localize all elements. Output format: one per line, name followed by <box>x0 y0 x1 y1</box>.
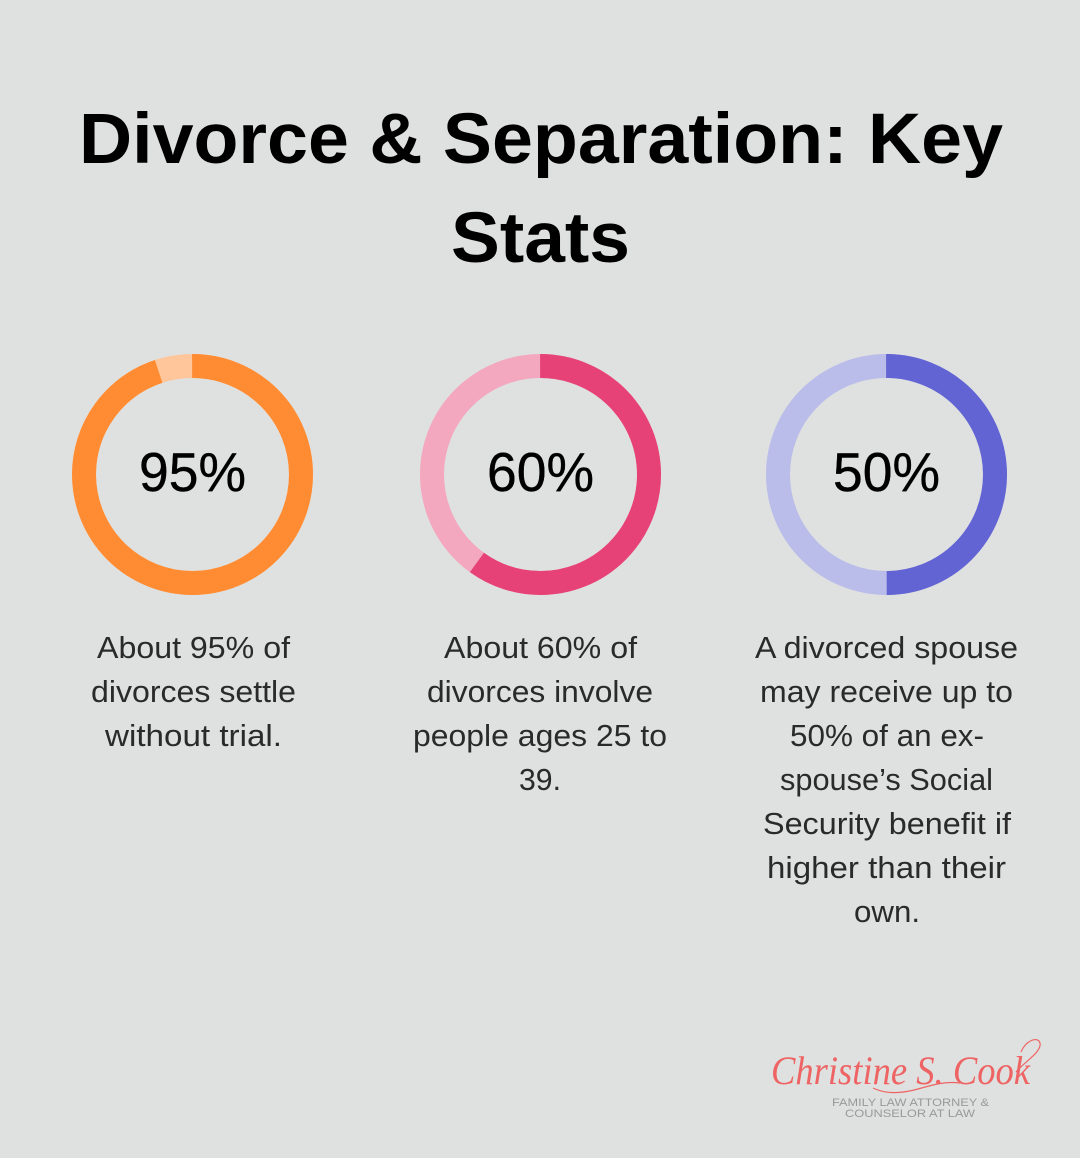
text block: 60% description <box>413 630 667 797</box>
title: Divorce & Separation: Key <box>79 100 1004 179</box>
text block: 95% description <box>91 630 296 753</box>
text block: 50% description: Security benefit if <box>763 806 1011 841</box>
text block: 95% description: About 95% of <box>97 630 290 665</box>
donut chart: 95% <box>84 366 301 583</box>
text block: 60% description: About 60% of <box>444 630 637 665</box>
text block: 50% description: spouse’s Social <box>780 762 993 797</box>
logo tagline: FAMILY LAW ATTORNEY & <box>832 1097 990 1109</box>
text block: 95% description: without trial. <box>104 718 282 753</box>
title <box>79 100 1004 278</box>
logo tagline: COUNSELOR AT LAW <box>845 1108 976 1120</box>
text block: 50% description: 50% of an ex- <box>790 718 984 753</box>
text block: 50% description: may receive up to <box>760 674 1013 709</box>
panel: 95% settle without trial <box>84 366 301 753</box>
panel: 60% ages 25 to 39 <box>413 366 667 797</box>
text block: 95% description: divorces settle <box>91 674 296 709</box>
logo: Christine S. Cook: Christine S. Cook <box>771 1048 1031 1093</box>
text block: 50% description: own. <box>854 894 920 929</box>
text block: 60% description: 39. <box>519 762 561 797</box>
panel: 50% social security <box>755 366 1018 929</box>
logo flourish <box>873 1040 1040 1093</box>
text block: 50% description: higher than their <box>767 850 1006 885</box>
text block: 50% description <box>755 630 1018 929</box>
stat number: 50%: 50% <box>833 441 940 503</box>
text block: 50% description: A divorced spouse <box>755 630 1018 665</box>
text block: 60% description: divorces involve <box>427 674 653 709</box>
title: Stats <box>451 199 630 278</box>
donut chart: 50% <box>778 366 995 583</box>
stat number: 95%: 95% <box>139 441 246 503</box>
logo tagline <box>832 1097 990 1120</box>
donut chart: 60% <box>432 366 649 583</box>
logo: Christine S. Cook <box>771 1040 1040 1120</box>
stat number: 60%: 60% <box>487 441 594 503</box>
text block: 60% description: people ages 25 to <box>413 718 667 753</box>
